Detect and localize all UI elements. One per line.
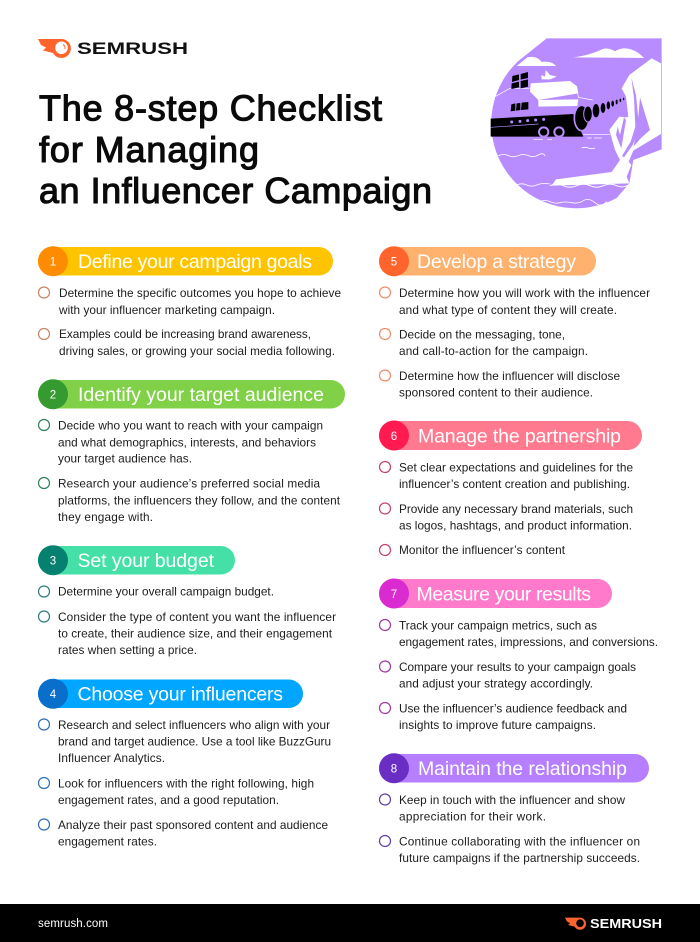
heading: step 4: Choose your influencers	[78, 684, 283, 706]
item	[38, 718, 331, 765]
purple background shape	[491, 38, 662, 208]
item	[38, 818, 328, 848]
heading: step 4: 4	[50, 689, 57, 701]
panel: step 7	[379, 578, 658, 732]
footer url: semrush.com	[38, 918, 108, 930]
heading: step 3: Set your budget	[78, 550, 215, 572]
item: Research your audience’s preferred social media	[58, 476, 320, 490]
title	[39, 88, 432, 211]
chain	[574, 98, 624, 131]
item: Influencer Analytics.	[58, 751, 165, 765]
item: engagement rates, impressions, and conversions.	[399, 635, 658, 649]
item	[380, 834, 640, 865]
heading: step 2: Identify your target audience	[78, 384, 324, 406]
item: Determine how the influencer will disclose	[399, 369, 620, 383]
heading: step 3: 3	[50, 556, 56, 568]
heading: step 4	[38, 679, 303, 709]
item: insights to improve future campaigns.	[399, 718, 596, 732]
footer logo	[565, 917, 662, 931]
item: Research and select influencers who align with your	[58, 718, 330, 732]
panel: step 8	[379, 753, 649, 865]
item: Set clear expectations and guidelines for the	[399, 460, 633, 474]
item: as logos, hashtags, and product information.	[399, 518, 632, 532]
item	[38, 776, 314, 807]
heading: step 2	[38, 379, 345, 409]
panel: step 1	[38, 246, 341, 358]
item	[380, 618, 658, 649]
ship windows	[511, 72, 528, 111]
item: Consider the type of content you want the influencer	[58, 610, 336, 624]
item: Determine how you will work with the influencer	[399, 286, 650, 300]
item	[38, 476, 341, 524]
icon: flame	[38, 39, 71, 58]
clouds	[517, 57, 556, 66]
title: The 8-step Checklist	[39, 88, 382, 128]
item: Determine your overall campaign budget.	[58, 584, 274, 598]
item	[380, 460, 633, 491]
heading: step 6: Manage the partnership	[418, 426, 621, 448]
ship hull	[491, 114, 583, 137]
heading: step 7	[379, 578, 612, 608]
item: and what demographics, interests, and behaviors	[58, 436, 316, 450]
item	[38, 327, 335, 358]
item: your target audience has.	[58, 452, 192, 466]
item: Determine the specific outcomes you hope to achieve	[59, 286, 341, 300]
item: Compare your results to your campaign goals	[399, 660, 636, 674]
item: they engage with.	[58, 510, 153, 524]
panel: step 2	[38, 379, 345, 524]
item	[380, 793, 625, 824]
panel: step 5	[379, 246, 650, 400]
item: and call-to-action for the campaign.	[399, 344, 588, 358]
item: brand and target audience. Use a tool like BuzzGuru	[58, 734, 331, 748]
illustration: ship and cliffs	[491, 38, 662, 208]
heading: step 6	[379, 420, 642, 450]
white cliffs	[552, 58, 661, 186]
panel: step 4	[38, 679, 331, 848]
item	[380, 328, 588, 358]
footer logo: SEMRUSH	[590, 917, 662, 931]
item	[380, 702, 627, 732]
waves	[498, 134, 630, 205]
item: Decide on the messaging, tone,	[399, 328, 565, 342]
item: Look for influencers with the right following, high	[58, 776, 314, 790]
item: and adjust your strategy accordingly.	[399, 676, 593, 690]
item	[380, 502, 633, 532]
heading: step 5: Develop a strategy	[417, 251, 576, 273]
item	[380, 286, 650, 317]
footer bar	[0, 904, 700, 942]
title: an Influencer Campaign	[39, 170, 432, 211]
heading: step 1: 1	[50, 256, 56, 268]
cliff facet shading	[616, 77, 650, 157]
item: driving sales, or growing your social media following.	[59, 344, 335, 358]
heading: step 7: 7	[391, 589, 397, 601]
item	[38, 286, 341, 317]
item: and what type of content they will create.	[399, 303, 617, 317]
item: sponsored content to their audience.	[399, 386, 593, 400]
logo: Semrush header	[38, 39, 188, 58]
item: influencer’s content creation and publishing.	[399, 477, 630, 491]
item: Provide any necessary brand materials, such	[399, 502, 633, 516]
item: Monitor the influencer’s content	[399, 543, 566, 557]
item	[38, 418, 323, 466]
item: Decide who you want to reach with your campaign	[58, 418, 323, 432]
item: engagement rates, and a good reputation.	[58, 793, 279, 807]
panel: step 6	[379, 420, 642, 557]
heading: step 1: Define your campaign goals	[78, 251, 312, 273]
heading: step 1	[38, 246, 333, 276]
heading: step 6: 6	[391, 431, 397, 443]
item	[380, 369, 620, 400]
item: Continue collaborating with the influencer on	[399, 834, 640, 848]
heading: step 8	[379, 753, 649, 783]
wordmark: SEMRUSH	[77, 40, 188, 58]
item: rates when setting a price.	[58, 643, 197, 657]
heading: step 8: Maintain the relationship	[418, 758, 627, 780]
item: Use the influencer’s audience feedback and	[399, 702, 627, 716]
anchor rings	[539, 127, 564, 137]
heading: step 3	[38, 545, 235, 575]
heading: step 7: Measure your results	[416, 584, 591, 606]
item: Examples could be increasing brand awareness,	[59, 327, 311, 341]
item: appreciation for their work.	[399, 810, 546, 824]
heading: step 2: 2	[50, 390, 56, 402]
item	[38, 610, 336, 657]
heading: step 5	[379, 246, 596, 276]
item: Analyze their past sponsored content and audience	[58, 818, 328, 832]
title: for Managing	[39, 129, 259, 170]
item: future campaigns if the partnership succeeds.	[399, 851, 640, 865]
item: to create, their audience size, and their engagement	[58, 626, 333, 640]
item: Track your campaign metrics, such as	[399, 618, 597, 632]
item: platforms, the influencers they follow, and the content	[58, 494, 341, 508]
heading: step 5: 5	[391, 256, 397, 268]
panel: step 3	[38, 545, 336, 657]
heading: step 8: 8	[391, 764, 397, 776]
ship superstructure	[495, 86, 593, 115]
item	[380, 660, 636, 690]
item: with your influencer marketing campaign.	[58, 303, 275, 317]
item: engagement rates.	[58, 834, 157, 848]
item: Keep in touch with the influencer and show	[399, 793, 625, 807]
